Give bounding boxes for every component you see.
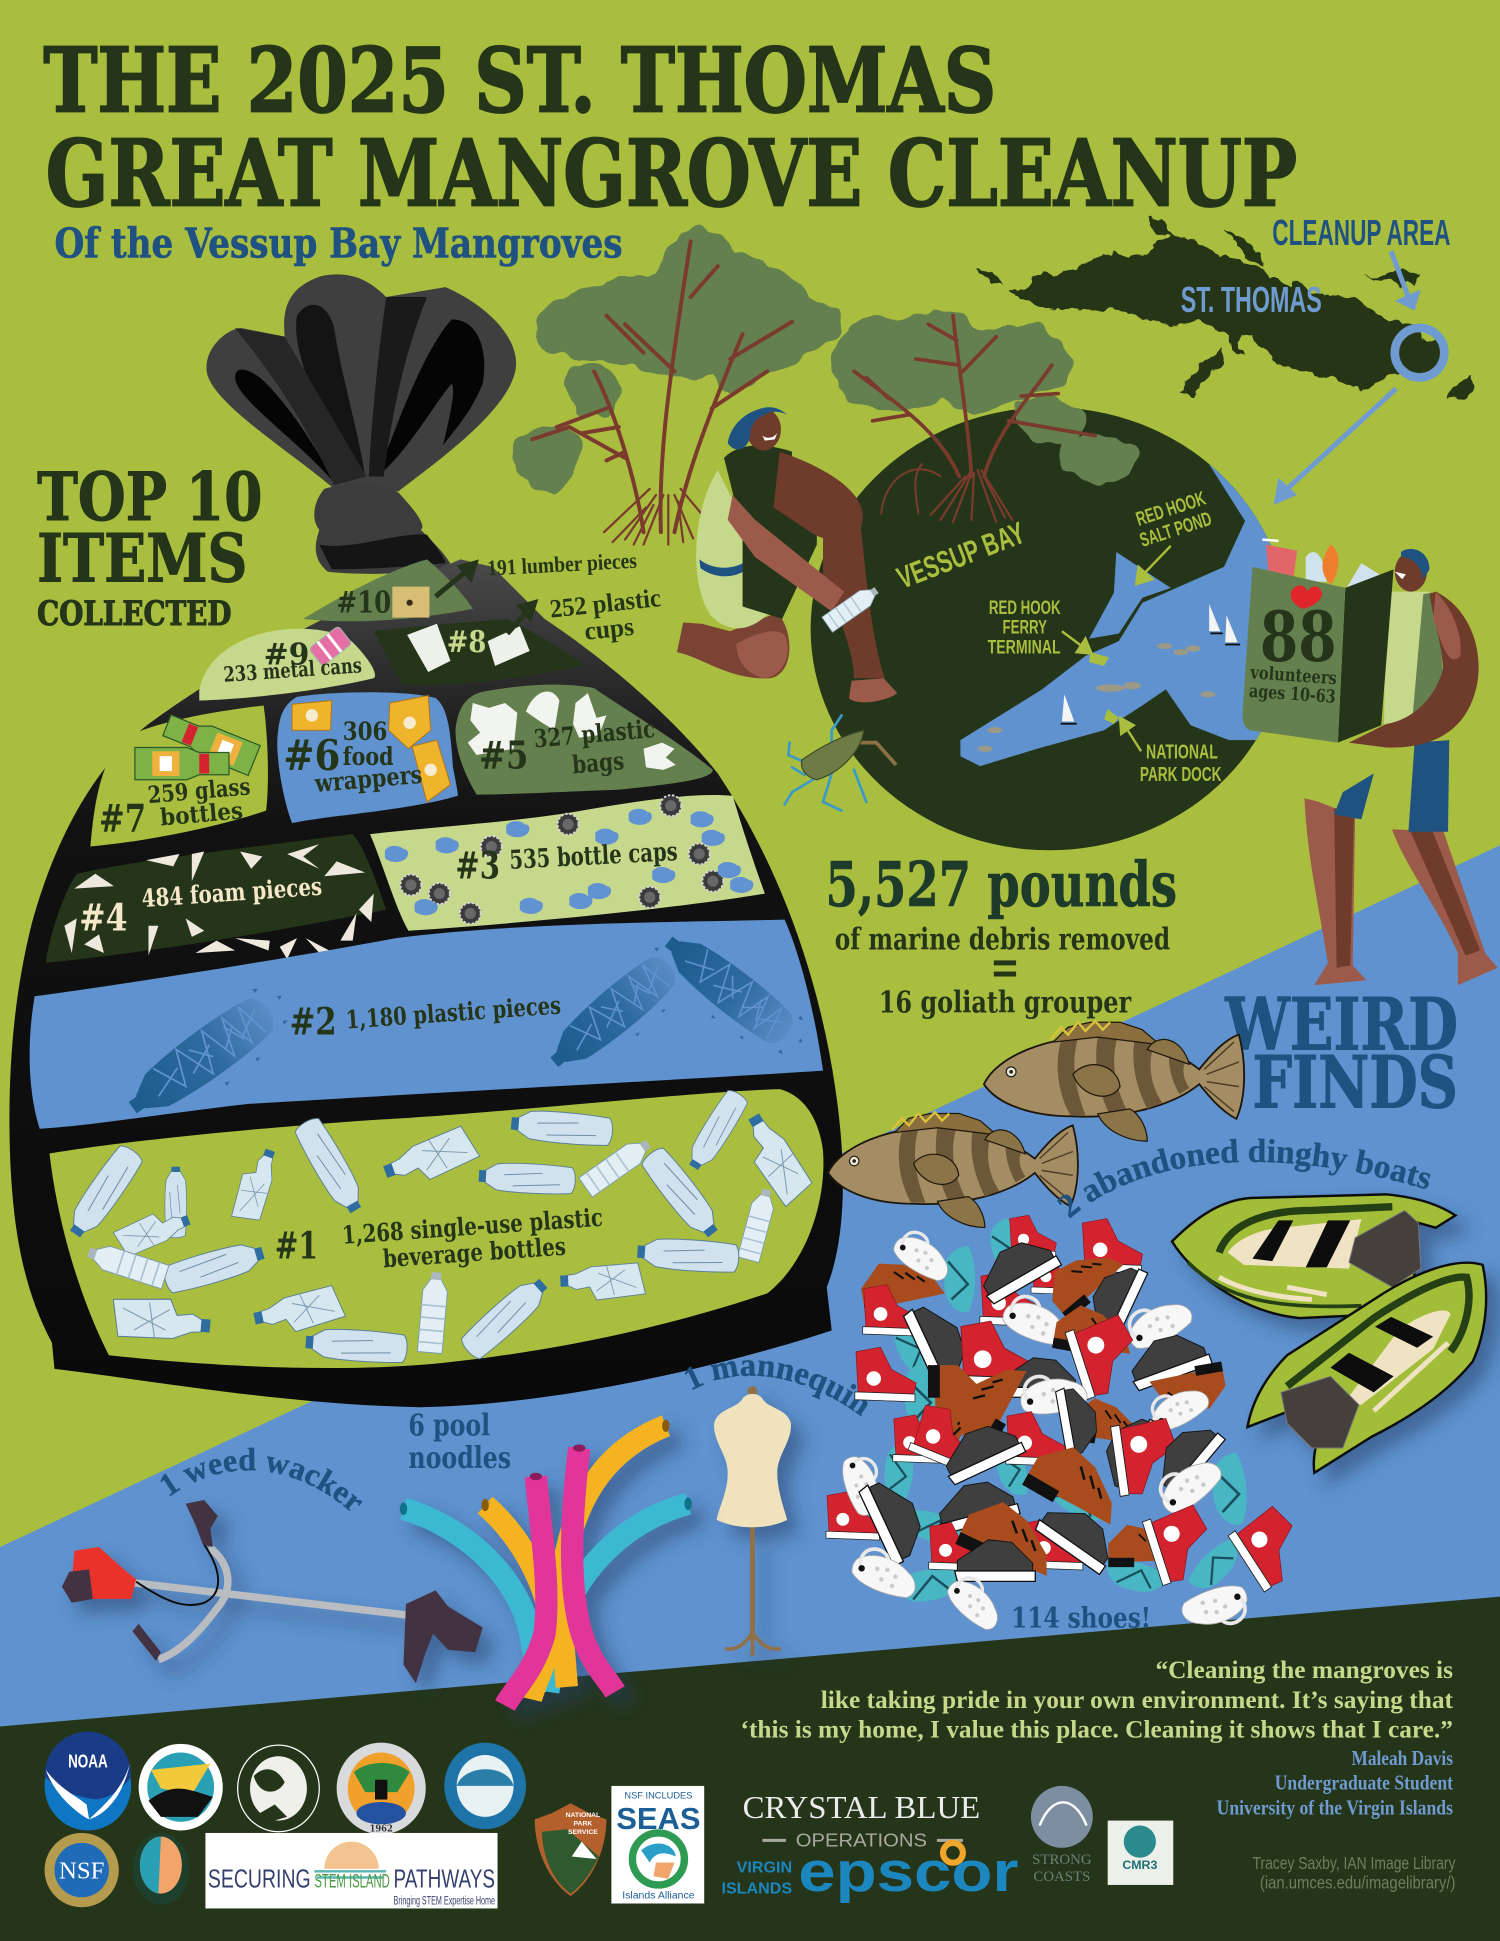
logo: NOAA: NOAA <box>68 1750 108 1771</box>
pile of 114 shoes <box>826 1215 1315 1638</box>
quote attribution: Maleah Davis <box>1351 1746 1453 1770</box>
label: National Park Dock: PARK DOCK <box>1140 764 1222 786</box>
title <box>43 28 1297 227</box>
section #2: plastic pieces <box>30 920 823 1138</box>
logo: SEAS Islands Alliance: NSF INCLUDES <box>624 1790 692 1800</box>
label: Red Hook Ferry Terminal: FERRY <box>1002 617 1047 639</box>
section #6: food wrappers <box>277 692 458 823</box>
logo: NSF: NSF <box>59 1858 104 1885</box>
logo: Crystal Blue Operations: OPERATIONS <box>796 1830 927 1851</box>
dinghy boats <box>1172 1194 1486 1473</box>
logo: Mangrove circle <box>238 1745 319 1832</box>
logo: Strong Coasts: COASTS <box>1033 1869 1090 1885</box>
logo: SEAS Islands Alliance <box>611 1786 704 1903</box>
bay map: dark circle <box>811 407 1312 850</box>
section #3: bottle caps <box>370 795 765 931</box>
quote: ‘this is my home, I value this place. Cleaning it shows that I care.” <box>741 1716 1453 1744</box>
tree: centre mangrove <box>834 309 1137 522</box>
section #10: lumber: 191 lumber pieces <box>487 548 638 580</box>
section #5: plastic bags <box>455 685 713 795</box>
label: Red Hook Salt Pond: RED HOOK <box>1133 488 1209 531</box>
section #8: plastic cups: cups <box>583 612 635 646</box>
logo: Securing STEM Island Pathways: SECURING <box>208 1863 311 1893</box>
logo: National Park Service arrowhead: SERVICE <box>568 1829 598 1836</box>
quote: like taking pride in your own environment. It’s saying that <box>821 1686 1454 1714</box>
label: Red Hook Ferry Terminal: TERMINAL <box>988 636 1061 658</box>
bay water <box>960 464 1271 766</box>
title: THE 2025 ST. THOMAS <box>43 28 996 133</box>
curved label: boats: 2 abandoned dinghy boats <box>1057 1138 1430 1218</box>
logo: NSF <box>45 1833 119 1907</box>
logo: National Park Service arrowhead: NATIONAL <box>566 1812 600 1819</box>
arrow: lumber pieces <box>436 572 465 597</box>
image credit <box>1252 1853 1456 1893</box>
trash bag: lobes <box>207 274 516 574</box>
quote attribution: Undergraduate Student <box>1275 1771 1453 1795</box>
label: St. Thomas: ST. THOMAS <box>1181 280 1322 320</box>
heading: weird finds: FINDS <box>1252 1041 1458 1125</box>
section #9: metal cans: #9 <box>264 638 309 673</box>
heading: top 10 items collected <box>37 457 262 633</box>
section #6: food wrappers: wrappers <box>313 760 423 798</box>
volunteer: kneeling person with bottle <box>677 407 897 702</box>
section #1: single-use plastic beverage bottles <box>50 1087 823 1368</box>
bag of volunteers: 88 <box>1260 597 1337 678</box>
trash bag: body <box>9 559 843 1407</box>
section #10: lumber <box>303 548 638 621</box>
section #5: plastic bags: #5 <box>479 734 528 779</box>
logo: Virgin Islands EPSCoR: epscor <box>798 1840 1019 1904</box>
logo: Crystal Blue Operations <box>743 1789 980 1851</box>
logo: Crystal Blue Operations: CRYSTAL BLUE <box>743 1789 980 1825</box>
label: Vessup Bay: VESSUP BAY <box>892 515 1030 596</box>
section #3: bottle caps: 535 bottle caps <box>509 837 678 876</box>
logo: Securing STEM Island Pathways: Bringing STEM Expertise Home <box>394 1895 495 1908</box>
section #9: metal cans: 233 metal cans <box>223 652 363 687</box>
logo: University of the Virgin Islands <box>337 1743 426 1835</box>
section #10: lumber: #10 <box>337 586 391 621</box>
section #9: metal cans <box>199 626 375 701</box>
logo: CMR3 <box>1108 1821 1173 1885</box>
image credit: (ian.umces.edu/imagelibrary/) <box>1260 1873 1455 1893</box>
label: shoes: 114 shoes! <box>1011 1601 1151 1635</box>
quote <box>741 1656 1454 1744</box>
section #7: glass bottles: 259 glass <box>147 772 251 809</box>
logo: Center for Marine and Environmental Studies <box>444 1743 526 1829</box>
section #3: bottle caps: #3 <box>455 844 500 888</box>
weed wacker <box>62 1500 483 1683</box>
label: pool noodles: 6 pool <box>408 1409 490 1444</box>
quote attribution <box>1217 1746 1453 1819</box>
logo: National Park Service arrowhead: PARK <box>574 1821 592 1828</box>
section #4: foam pieces <box>46 834 386 963</box>
logo: Virgin Islands EPSCoR: VIRGIN <box>737 1859 792 1877</box>
label: Red Hook Salt Pond <box>1133 488 1214 552</box>
tree: left mangrove <box>512 228 838 545</box>
footer: dark band <box>0 1597 1500 1941</box>
label: pool noodles: noodles <box>408 1441 511 1476</box>
logo: Securing STEM Island Pathways <box>205 1833 498 1908</box>
section #4: foam pieces: 484 foam pieces <box>141 872 323 913</box>
section #6: food wrappers: 306 <box>343 717 387 746</box>
background: blue diagonal band <box>0 845 1500 1733</box>
crab <box>785 715 896 811</box>
section #2: plastic pieces: 1,180 plastic pieces <box>345 991 562 1034</box>
bag of volunteers <box>1243 540 1394 743</box>
label: Red Hook Salt Pond: SALT POND <box>1137 508 1214 552</box>
section #6: food wrappers: #6 <box>283 730 340 780</box>
section #7: glass bottles <box>90 705 268 847</box>
title: GREAT MANGROVE CLEANUP <box>46 119 1297 227</box>
section #2: plastic pieces: #2 <box>290 1000 337 1044</box>
section #8: plastic cups: 252 plastic <box>548 583 662 624</box>
map pointers <box>1062 546 1171 751</box>
bottle in hand <box>822 583 882 632</box>
section #7: glass bottles: bottles <box>159 796 244 831</box>
map: St. Thomas island <box>978 213 1475 399</box>
bag of volunteers: volunteers <box>1249 662 1338 689</box>
label: pool noodles <box>408 1409 511 1476</box>
logo: National Park Service arrowhead <box>535 1803 606 1896</box>
section #6: food wrappers: food <box>343 742 394 771</box>
bag of volunteers: ages 10-63 <box>1248 681 1336 708</box>
logo: turtle emblem <box>132 1833 189 1905</box>
logo: Strong Coasts <box>1031 1786 1093 1885</box>
stat: pounds removed: 16 goliath grouper <box>879 985 1132 1020</box>
subtitle: Of the Vessup Bay Mangroves <box>54 219 623 267</box>
pool noodles <box>400 1420 692 1705</box>
heading: top 10 items collected: COLLECTED <box>37 594 231 633</box>
logo: Virgin Islands agency <box>139 1744 223 1830</box>
small fish in the bay <box>978 643 1215 752</box>
section #5: plastic bags: 327 plastic <box>533 714 656 754</box>
stat: pounds removed <box>825 848 1177 1020</box>
label: National Park Dock: NATIONAL <box>1146 742 1218 764</box>
sailboats <box>1061 604 1240 725</box>
marker: cleanup ring and arrows <box>1274 251 1444 505</box>
volunteer: person carrying bag <box>1243 540 1498 985</box>
section #5: plastic bags: bags <box>571 746 625 780</box>
quote attribution: University of the Virgin Islands <box>1217 1795 1453 1819</box>
logo: Virgin Islands EPSCoR: ISLANDS <box>722 1880 792 1898</box>
arrow: plastic cups <box>507 613 526 634</box>
logo: Securing STEM Island Pathways: STEM ISLAND <box>314 1870 390 1892</box>
logo: Virgin Islands EPSCoR <box>722 1840 1019 1904</box>
heading: top 10 items collected: ITEMS <box>37 519 248 598</box>
section #8: plastic cups <box>374 583 662 685</box>
section #7: glass bottles: #7 <box>99 797 146 842</box>
heading: weird finds <box>1224 983 1458 1125</box>
logo: SEAS Islands Alliance: SEAS <box>616 1801 701 1836</box>
heading: top 10 items collected: TOP 10 <box>37 457 262 536</box>
logo: University of the Virgin Islands: 1962 <box>370 1824 393 1835</box>
label: Red Hook Ferry Terminal: RED HOOK <box>989 597 1061 619</box>
knot <box>314 484 452 574</box>
logo: Strong Coasts: STRONG <box>1032 1852 1092 1868</box>
goliath grouper fish <box>828 1021 1244 1228</box>
quote: “Cleaning the mangroves is <box>1155 1656 1453 1684</box>
salt pond <box>1089 552 1171 639</box>
curved label: mannequin: 1 mannequin <box>684 1360 868 1416</box>
stat: pounds removed: of marine debris removed <box>835 922 1170 957</box>
curved label: weed wacker: 1 weed wacker <box>160 1448 362 1511</box>
logo: NOAA <box>45 1731 131 1830</box>
logo: Securing STEM Island Pathways: PATHWAYS <box>394 1863 495 1893</box>
logo: CMR3: CMR3 <box>1122 1858 1157 1872</box>
mannequin <box>714 1386 791 1656</box>
section #4: foam pieces: #4 <box>79 896 127 940</box>
section #1: single-use plastic beverage bottles: 1,268 single-use plastic <box>341 1203 604 1250</box>
heading: weird finds: WEIRD <box>1224 983 1458 1067</box>
section #1: single-use plastic beverage bottles: #1 <box>275 1224 318 1268</box>
label: Red Hook Ferry Terminal <box>988 597 1061 658</box>
section #1: single-use plastic beverage bottles: beverage bottles <box>382 1232 567 1273</box>
section #8: plastic cups: #8 <box>447 625 486 660</box>
label: National Park Dock <box>1140 742 1222 786</box>
stat: pounds removed: 5,527 pounds <box>825 848 1177 921</box>
logo: SEAS Islands Alliance: Islands Alliance <box>622 1890 695 1902</box>
image credit: Tracey Saxby, IAN Image Library <box>1252 1853 1456 1873</box>
